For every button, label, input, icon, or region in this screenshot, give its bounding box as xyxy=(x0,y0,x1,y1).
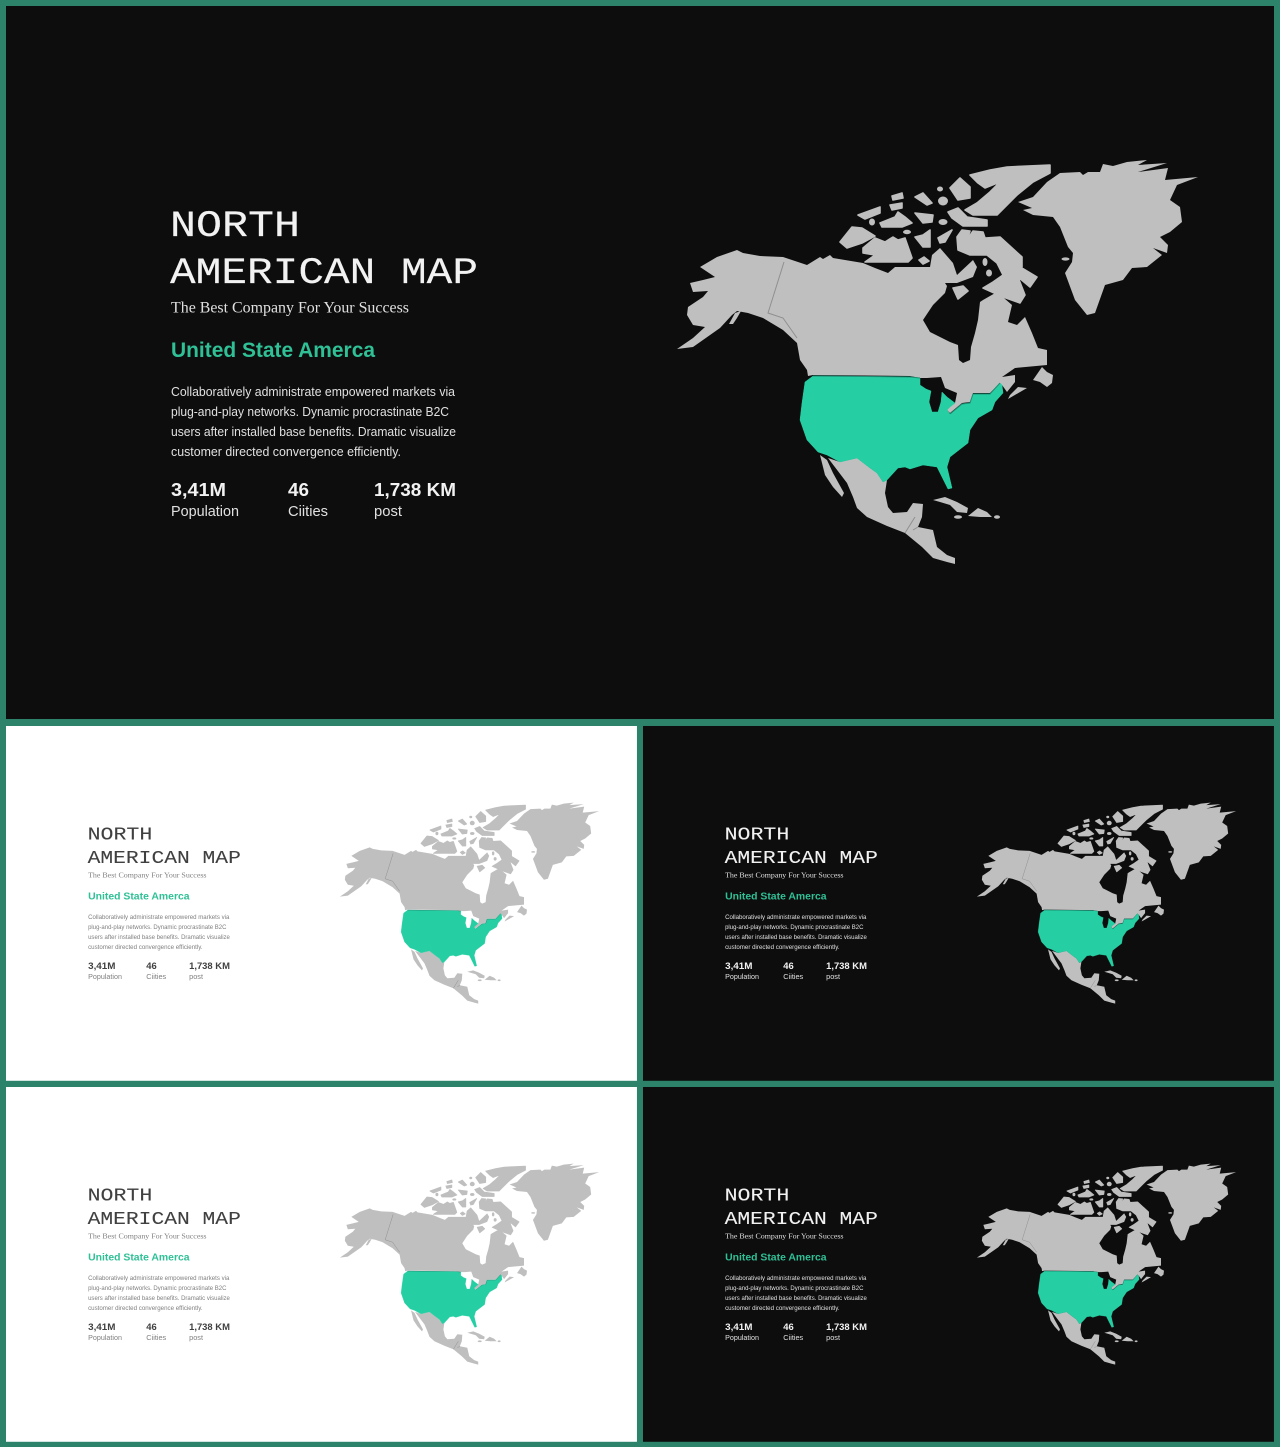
body text: plug-and-play networks. Dynamic procrastinate B2C xyxy=(171,405,449,419)
body text: customer directed convergence efficiently. xyxy=(88,944,203,951)
title xyxy=(88,1185,241,1230)
title: AMERICAN MAP xyxy=(725,1209,878,1230)
panel: dark slide bottom right xyxy=(643,1087,1274,1442)
stat: post xyxy=(826,961,867,981)
stat: population: Population xyxy=(171,504,239,520)
subtitle: The Best Company For Your Success xyxy=(725,1232,844,1241)
stat: cities: Ciities xyxy=(783,1333,804,1342)
stat: cities: 46 xyxy=(783,1322,794,1332)
subtitle: The Best Company For Your Success xyxy=(725,871,844,880)
stat: population xyxy=(88,1322,122,1342)
body text xyxy=(725,914,867,951)
title: AMERICAN MAP xyxy=(725,848,878,869)
title xyxy=(725,1185,878,1230)
body text: customer directed convergence efficiently. xyxy=(725,944,840,951)
stat: cities xyxy=(146,1322,167,1342)
stat: population: Population xyxy=(88,972,122,981)
map: North America with USA highlighted xyxy=(977,1164,1236,1365)
panel: white slide top left xyxy=(6,726,637,1081)
body text: plug-and-play networks. Dynamic procrastinate B2C xyxy=(88,924,227,931)
map: North America with USA highlighted xyxy=(340,803,599,1004)
map: North America with USA highlighted xyxy=(677,160,1198,564)
title: NORTH xyxy=(88,1185,152,1206)
stat: post: post xyxy=(374,504,402,520)
stat: population: 3,41M xyxy=(88,961,115,971)
stat: cities xyxy=(288,480,328,520)
body text xyxy=(171,385,456,459)
stat: post: 1,738 KM xyxy=(826,1322,867,1332)
stat: cities: 46 xyxy=(288,480,309,500)
body text: users after installed base benefits. Dramatic visualize xyxy=(88,1295,230,1302)
stat: cities: 46 xyxy=(146,961,157,971)
title: NORTH xyxy=(88,824,152,845)
body text: Collaboratively administrate empowered markets via xyxy=(88,1275,230,1282)
panel: large dark slide xyxy=(6,6,1274,719)
stat: population: 3,41M xyxy=(725,1322,752,1332)
title xyxy=(170,206,478,295)
stat: post: 1,738 KM xyxy=(189,1322,230,1332)
heading: country: United State Amerca xyxy=(725,892,827,903)
stat: cities: Ciities xyxy=(288,504,328,520)
body text xyxy=(725,1275,867,1312)
stat: population xyxy=(171,480,239,520)
stat: population: 3,41M xyxy=(725,961,752,971)
title xyxy=(88,824,241,869)
body text: customer directed convergence efficiently. xyxy=(171,445,401,459)
body text: users after installed base benefits. Dramatic visualize xyxy=(88,934,230,941)
title: AMERICAN MAP xyxy=(88,1209,241,1230)
stat: post: post xyxy=(189,972,203,981)
title xyxy=(725,824,878,869)
stat: post: post xyxy=(189,1333,203,1342)
heading: country: United State Amerca xyxy=(171,339,375,362)
stat: population: 3,41M xyxy=(88,1322,115,1332)
body text: Collaboratively administrate empowered markets via xyxy=(725,914,867,921)
body text: plug-and-play networks. Dynamic procrastinate B2C xyxy=(725,924,864,931)
body text: users after installed base benefits. Dramatic visualize xyxy=(725,934,867,941)
body text: users after installed base benefits. Dramatic visualize xyxy=(171,425,456,439)
title: NORTH xyxy=(725,824,789,845)
stat: post: 1,738 KM xyxy=(374,480,456,500)
title: AMERICAN MAP xyxy=(170,253,478,295)
subtitle: The Best Company For Your Success xyxy=(88,1232,207,1241)
map: North America with USA highlighted xyxy=(340,1164,599,1365)
body text xyxy=(88,1275,230,1312)
title: NORTH xyxy=(170,206,300,248)
stat: post: post xyxy=(826,1333,840,1342)
body text: Collaboratively administrate empowered markets via xyxy=(725,1275,867,1282)
stat: population xyxy=(88,961,122,981)
stat: population xyxy=(725,961,759,981)
stat: population: Population xyxy=(88,1333,122,1342)
stat: post xyxy=(189,961,230,981)
stat: post xyxy=(189,1322,230,1342)
stat: cities xyxy=(783,1322,804,1342)
body text: plug-and-play networks. Dynamic procrastinate B2C xyxy=(88,1285,227,1292)
heading: country: United State Amerca xyxy=(88,892,190,903)
stat: cities: Ciities xyxy=(146,972,167,981)
stat: post: 1,738 KM xyxy=(826,961,867,971)
subtitle: The Best Company For Your Success xyxy=(171,300,409,316)
title: AMERICAN MAP xyxy=(88,848,241,869)
stat: post: 1,738 KM xyxy=(189,961,230,971)
panel: white slide bottom left xyxy=(6,1087,637,1442)
body text: plug-and-play networks. Dynamic procrastinate B2C xyxy=(725,1285,864,1292)
stat: population xyxy=(725,1322,759,1342)
stat: cities: 46 xyxy=(783,961,794,971)
panel: dark slide top right xyxy=(643,726,1274,1081)
map: North America with USA highlighted xyxy=(977,803,1236,1004)
stat: post xyxy=(374,480,456,520)
stat: population: 3,41M xyxy=(171,480,226,500)
body text: customer directed convergence efficiently. xyxy=(88,1305,203,1312)
body text xyxy=(88,914,230,951)
heading: country: United State Amerca xyxy=(88,1253,190,1264)
stat: cities: 46 xyxy=(146,1322,157,1332)
body text: customer directed convergence efficiently. xyxy=(725,1305,840,1312)
heading: country: United State Amerca xyxy=(725,1253,827,1264)
stat: post: post xyxy=(826,972,840,981)
title: NORTH xyxy=(725,1185,789,1206)
stat: population: Population xyxy=(725,1333,759,1342)
subtitle: The Best Company For Your Success xyxy=(88,871,207,880)
stat: post xyxy=(826,1322,867,1342)
stat: cities xyxy=(783,961,804,981)
stat: population: Population xyxy=(725,972,759,981)
body text: users after installed base benefits. Dramatic visualize xyxy=(725,1295,867,1302)
body text: Collaboratively administrate empowered markets via xyxy=(171,385,455,399)
body text: Collaboratively administrate empowered markets via xyxy=(88,914,230,921)
stat: cities: Ciities xyxy=(146,1333,167,1342)
stat: cities xyxy=(146,961,167,981)
stat: cities: Ciities xyxy=(783,972,804,981)
